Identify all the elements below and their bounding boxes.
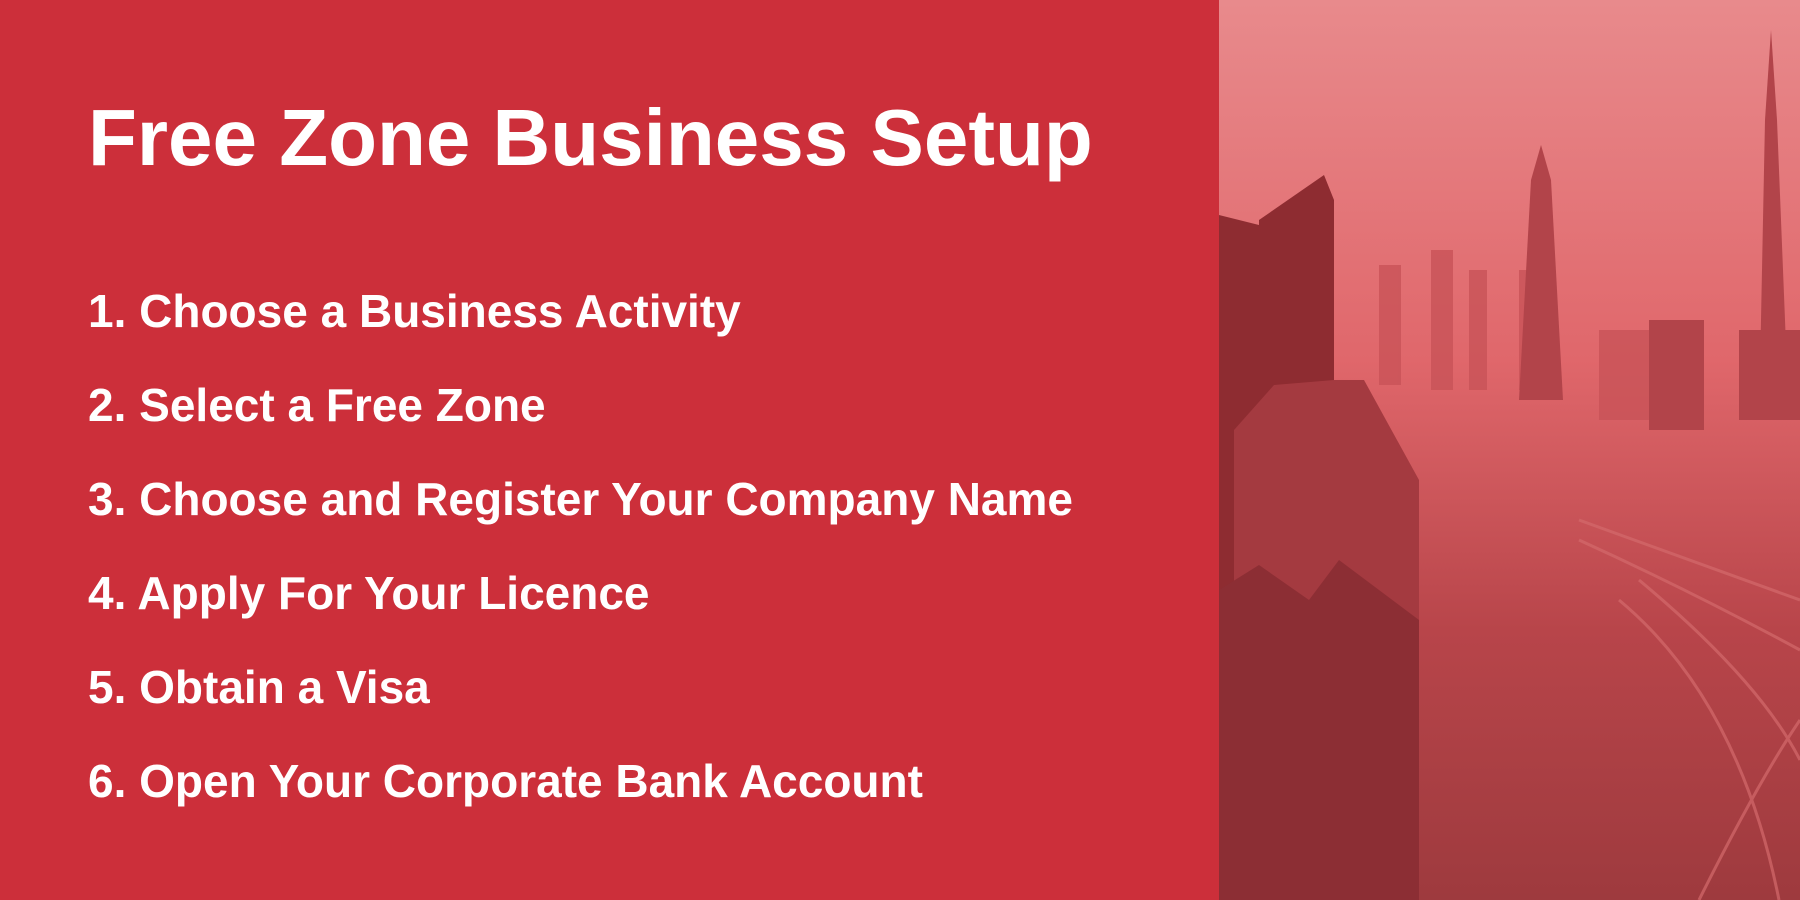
title: Free Zone Business Setup [88, 93, 1093, 182]
step 5: 5. Obtain a Visa [88, 661, 430, 713]
step 3: 3. Choose and Register Your Company Name [88, 473, 1073, 525]
step 4: 4. Apply For Your Licence [88, 567, 650, 619]
step 2: 2. Select a Free Zone [88, 379, 546, 431]
step 1: 1. Choose a Business Activity [88, 285, 741, 337]
panel: city image [1219, 0, 1800, 900]
panel: text [0, 0, 1219, 900]
step 6: 6. Open Your Corporate Bank Account [88, 755, 923, 807]
